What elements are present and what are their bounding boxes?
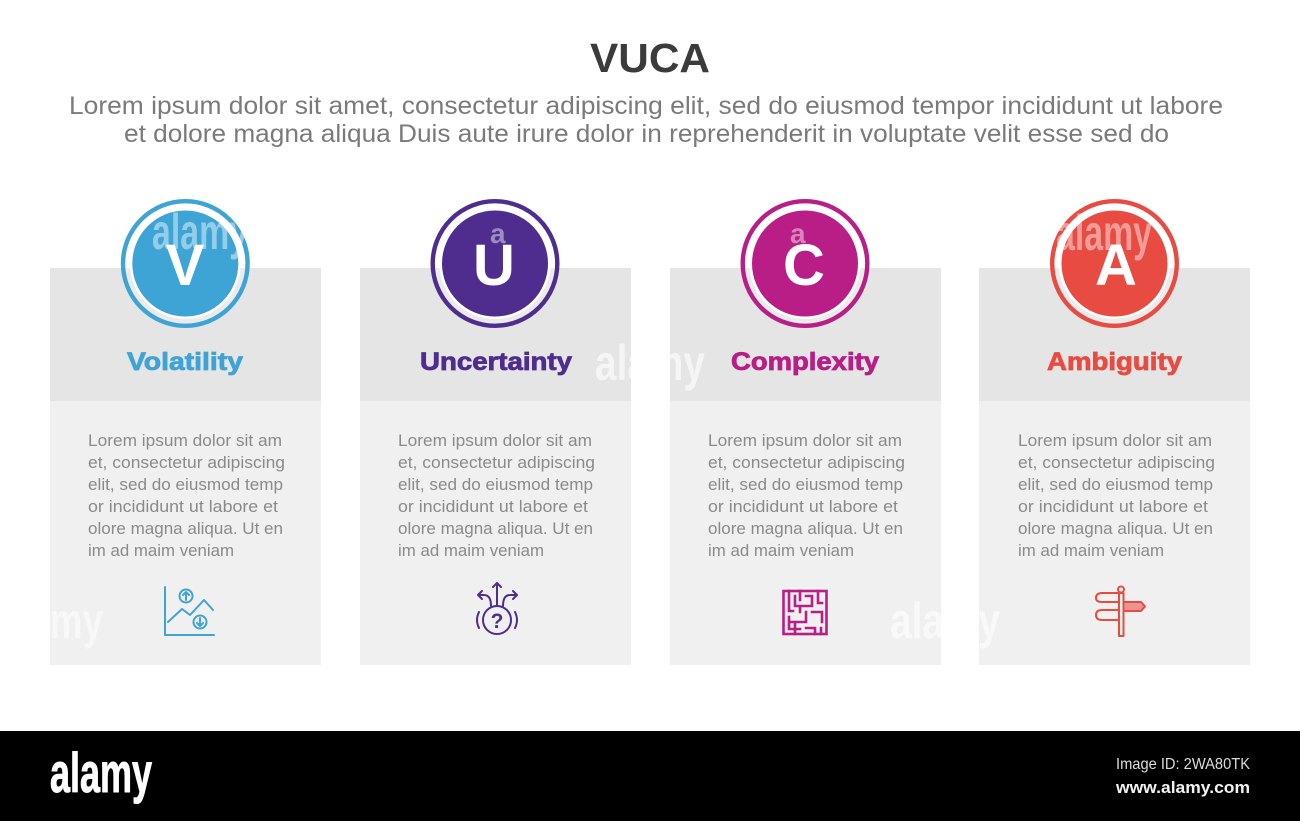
description: Ambiguity: or incididunt ut labore et <box>1018 497 1208 516</box>
heading: Ambiguity: Ambiguity <box>1047 348 1182 376</box>
panel body <box>979 401 1250 665</box>
description: Volatility: elit, sed do eiusmod temp <box>88 475 283 494</box>
footer bar <box>0 731 1300 821</box>
image id: Image ID: 2WA80TK <box>1116 756 1250 773</box>
description: Uncertainty: im ad maim veniam <box>398 541 544 560</box>
description: Complexity: elit, sed do eiusmod temp <box>708 475 903 494</box>
website: www.alamy.com <box>1115 778 1250 797</box>
badge: V: V <box>166 233 205 298</box>
badge: U: U <box>473 233 515 298</box>
badge: U: a <box>490 218 506 249</box>
description: Uncertainty: or incididunt ut labore et <box>398 497 588 516</box>
panel body <box>670 401 941 665</box>
description: Ambiguity: elit, sed do eiusmod temp <box>1018 475 1213 494</box>
panel: volatility <box>50 201 321 665</box>
description: Complexity: Lorem ipsum dolor sit am <box>708 431 902 450</box>
panel header band <box>979 268 1250 401</box>
description: Uncertainty: olore magna aliqua. Ut en <box>398 519 593 538</box>
heading: Uncertainty: Uncertainty <box>420 348 572 376</box>
title: VUCA <box>590 35 710 81</box>
panel: uncertainty <box>360 201 631 665</box>
badge: A: A <box>1095 233 1137 298</box>
badge: V <box>123 201 248 326</box>
panel body <box>50 401 321 665</box>
description: Ambiguity: Lorem ipsum dolor sit am <box>1018 431 1212 450</box>
description: Ambiguity: im ad maim veniam <box>1018 541 1164 560</box>
panel: ambiguity <box>979 201 1250 665</box>
icon: branching arrows with question mark: ? <box>491 610 503 633</box>
badge: V: alamy <box>152 204 248 260</box>
panel header band <box>50 268 321 401</box>
icon: branching arrows with question mark <box>477 583 517 634</box>
badge: C <box>743 201 867 326</box>
description: Complexity: or incididunt ut labore et <box>708 497 898 516</box>
panel body <box>360 401 631 665</box>
description: Uncertainty: et, consectetur adipiscing <box>398 453 595 472</box>
panel header band <box>360 268 631 401</box>
description: Complexity: et, consectetur adipiscing <box>708 453 905 472</box>
description: Complexity: im ad maim veniam <box>708 541 854 560</box>
description: Ambiguity: et, consectetur adipiscing <box>1018 453 1215 472</box>
description: Volatility: et, consectetur adipiscing <box>88 453 285 472</box>
badge: A <box>1052 201 1177 326</box>
footer logo: alamy <box>50 741 152 804</box>
badge: C: a <box>790 218 806 249</box>
description: Volatility: im ad maim veniam <box>88 541 234 560</box>
panel header band <box>670 268 941 401</box>
watermark: center: alamy <box>595 335 705 391</box>
icon: signpost <box>1096 586 1145 636</box>
icon: chart with up and down arrows <box>165 587 214 635</box>
panel: complexity <box>670 201 941 665</box>
badge: U <box>433 201 557 326</box>
subtitle text <box>69 92 1223 148</box>
heading: Complexity: Complexity <box>731 348 879 376</box>
description: Ambiguity <box>1018 431 1215 560</box>
description: Ambiguity: olore magna aliqua. Ut en <box>1018 519 1213 538</box>
heading: Volatility: Volatility <box>127 348 243 376</box>
description: Volatility <box>88 431 285 560</box>
description: Uncertainty: elit, sed do eiusmod temp <box>398 475 593 494</box>
description: Complexity: olore magna aliqua. Ut en <box>708 519 903 538</box>
icon: maze <box>784 591 826 634</box>
description: Uncertainty: Lorem ipsum dolor sit am <box>398 431 592 450</box>
badge: C: C <box>783 233 825 298</box>
description: Volatility: or incididunt ut labore et <box>88 497 278 516</box>
description: Volatility: olore magna aliqua. Ut en <box>88 519 283 538</box>
subtitle text: Lorem ipsum dolor sit amet, consectetur adipiscing elit, sed do eiusmod tempor incididunt ut labore <box>69 92 1223 120</box>
badge: A: alamy <box>1056 205 1152 261</box>
description: Complexity <box>708 431 905 560</box>
subtitle text: et dolore magna aliqua Duis aute irure dolor in reprehenderit in voluptate velit esse sed do <box>124 120 1169 148</box>
description: Uncertainty <box>398 431 595 560</box>
watermark: lower left: my <box>50 593 103 649</box>
watermark: lower right: alamy <box>890 593 1000 649</box>
description: Volatility: Lorem ipsum dolor sit am <box>88 431 282 450</box>
